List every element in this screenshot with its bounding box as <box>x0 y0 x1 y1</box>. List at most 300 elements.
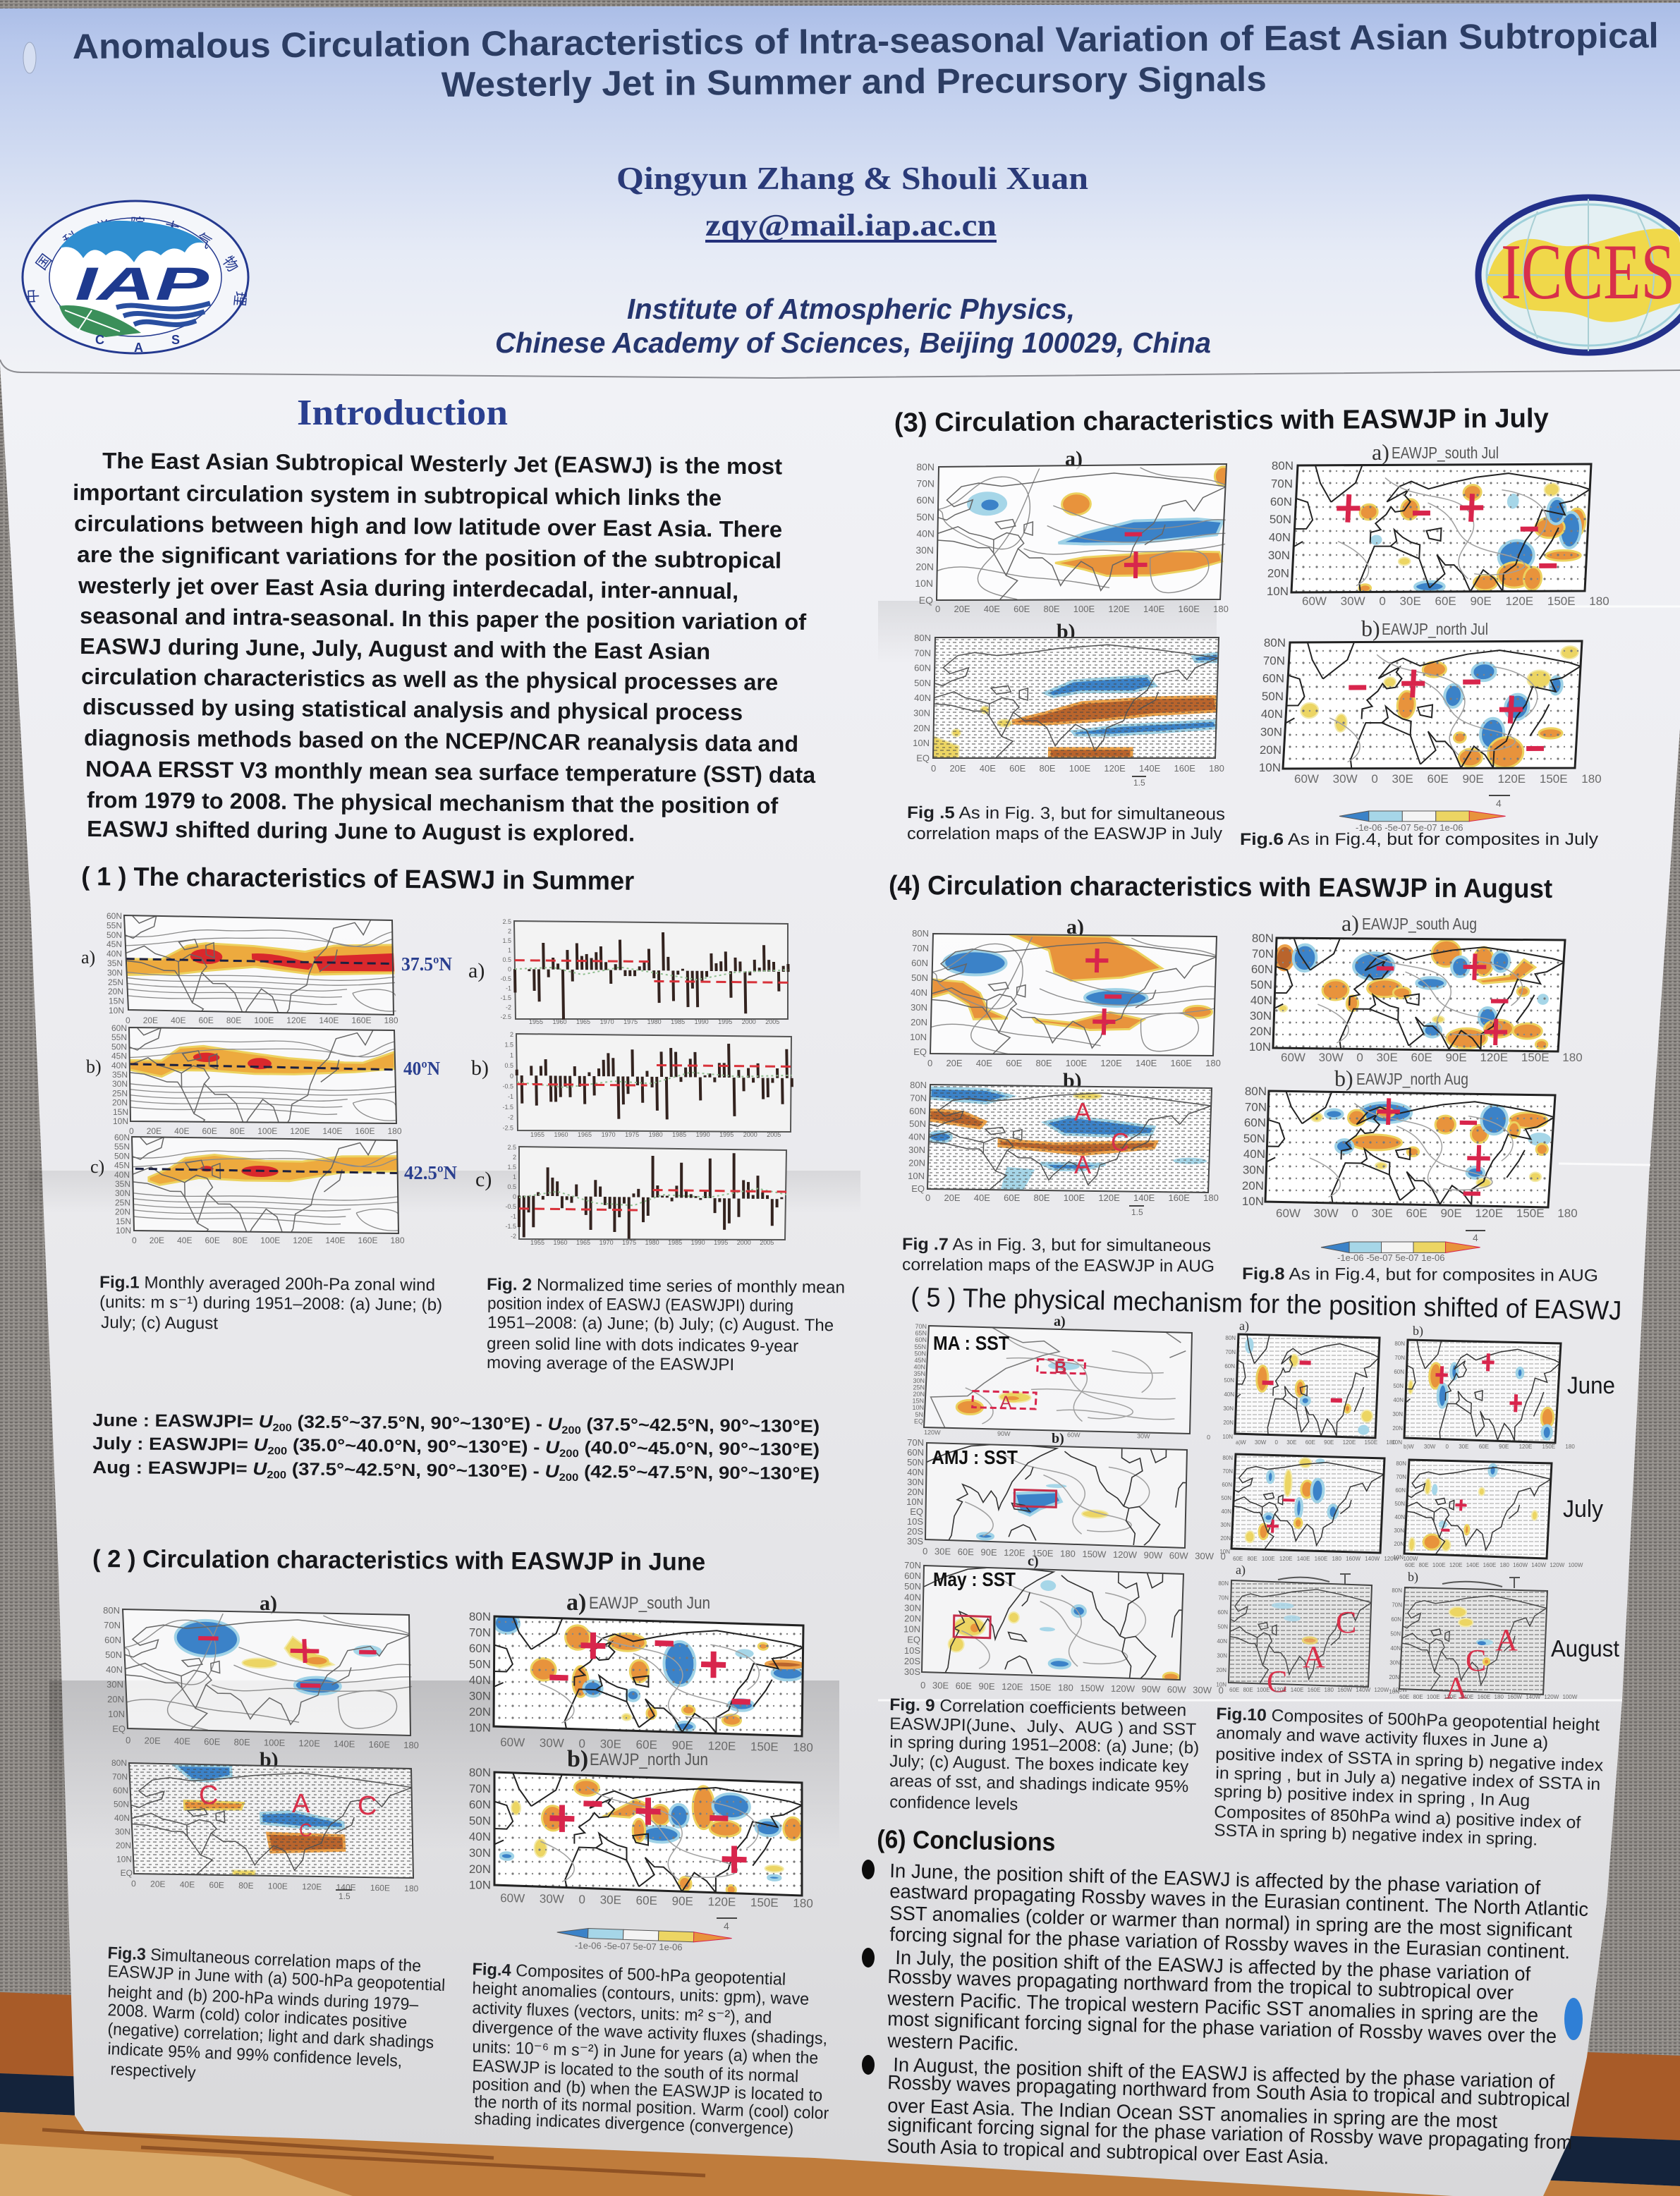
map: Fig.8a: 50N <box>1250 978 1272 992</box>
caption: Fig.1: July; (c) August <box>101 1313 219 1333</box>
equations: EASWJPI definitions: (37.5°~42.5°N, 90°~130°E) <box>581 1415 820 1436</box>
map: Fig.3b 200-hPa wind correlation: b) <box>260 1748 279 1771</box>
map: Fig.10 August b: 30N <box>1389 1660 1400 1666</box>
map: Fig.6b: 60N <box>1262 672 1284 685</box>
intro text block: circulation characteristics as well as the physical processes are <box>81 664 778 695</box>
map: Fig.5a: 40N <box>916 527 935 539</box>
map: Fig.9a MA SST: 5N <box>915 1411 923 1418</box>
map: Fig.4b EAWJP north June <box>469 1746 813 1910</box>
caption: Fig.3: 2008. Warm (cold) color indicates positive <box>107 2001 408 2032</box>
caption: Fig.4: height anomalies (contours, units: gpm), wave <box>472 1979 810 2009</box>
equations: EASWJPI definitions: July : EASWJPI= U <box>92 1434 267 1455</box>
map: Fig.7a <box>910 915 1221 1068</box>
caption: Fig.1: (units: m s⁻¹) during 1951–2008: (a) June; (b) <box>99 1293 442 1314</box>
intro text block: important circulation system in subtropical which links the <box>73 480 722 511</box>
map: Fig.4a EAWJP south June <box>469 1590 813 1755</box>
caption: Fig.7 <box>902 1235 1215 1276</box>
map: Fig.5b: 40N <box>914 693 931 703</box>
map: Fig.8b: 60N <box>1244 1116 1266 1130</box>
bar chart: Fig.2a June index: 1.5 <box>502 937 511 944</box>
logo: IAP <box>21 200 250 355</box>
map: Fig.6b: 50N <box>1262 690 1284 703</box>
map: Fig.3b 200-hPa wind correlation: 50N <box>114 1800 129 1810</box>
caption: Fig.3: (negative) correlation; light and dark shadings <box>107 2020 434 2052</box>
map: Fig.1c August zonal wind: 60N <box>114 1133 130 1142</box>
intro text block: are the significant variations for the position of the subtropical <box>77 542 781 573</box>
map: Fig.3b 200-hPa wind correlation: C <box>299 1819 312 1841</box>
map: Fig.6b: b) <box>1361 616 1380 641</box>
label: chart b: b) <box>471 1056 489 1080</box>
equations: EASWJPI definitions: (32.5°~37.5°N, 90°~130°E) - <box>292 1412 548 1434</box>
map: Fig.1c August zonal wind: 30N <box>115 1188 130 1198</box>
intro text block: The East Asian Subtropical Westerly Jet (EASWJ) is the most <box>102 448 783 479</box>
map: Fig.5a: 0 20E 40E 60E 80E 100E 120E 140E 160E 180 <box>935 604 1229 614</box>
authors: Qingyun Zhang & Shouli Xuan <box>616 160 1088 196</box>
map: Fig.1a June zonal wind: 0 20E 40E 60E 80E 100E 120E 140E 160E 180 <box>126 1015 398 1025</box>
map: Fig.1a June zonal wind: 55N <box>106 920 122 930</box>
caption: Fig.8: Fig.8 As in Fig.4, but for composites in AUG <box>1242 1264 1598 1286</box>
map: Fig.3b 200-hPa wind correlation: 30N <box>115 1826 130 1836</box>
heading: section 5: ( 5 ) The physical mechanism for the position shifted of EASWJ <box>911 1283 1622 1326</box>
map: Fig.9c May SST: EQ <box>907 1635 920 1645</box>
map: Fig.10 June a: 60N <box>1224 1363 1235 1370</box>
conclusion: July: most significant forcing signal for the phase variation of Rossby waves over the <box>887 2008 1557 2047</box>
map: Fig.6b <box>1259 616 1602 786</box>
heading: section 3: (3) Circulation characteristics with EASWJP in July <box>894 404 1549 438</box>
map: Fig.10 July b <box>1393 1460 1583 1568</box>
map: Fig.7b <box>908 1069 1219 1217</box>
caption: Fig.6: Fig.6 As in Fig.4, but for composites in July <box>1240 830 1598 849</box>
map: Fig.1a June zonal wind: 20N <box>108 987 123 996</box>
map: Fig.10 July b: 10N <box>1393 1554 1404 1561</box>
map: Fig.6b: 60W 30W 0 30E 60E 90E 120E 150E 180 <box>1294 772 1602 786</box>
map: Fig.9c May SST: 40N <box>904 1592 921 1602</box>
caption: Fig.9: EASWJPI(June、July、AUG ) and SST <box>889 1714 1197 1739</box>
caption: Fig.7: correlation maps of the EASWJP in AUG <box>902 1255 1215 1276</box>
map: Fig.7b: EQ <box>911 1183 925 1194</box>
map: Fig.1a June zonal wind: 35N <box>107 958 123 968</box>
map: Fig.1c August zonal wind: 40N <box>114 1170 130 1180</box>
caption: Fig.4 <box>472 1960 829 2139</box>
map: Fig.3a geopotential correlation: a) <box>260 1592 277 1615</box>
conclusion: August: Rossby waves propagating northward from South Asia to tropical and subtropical <box>887 2071 1570 2111</box>
map: Fig.6a <box>1267 439 1609 608</box>
equations: EASWJPI definitions: U <box>545 1438 560 1458</box>
colour bar: Fig.6 <box>1339 811 1506 833</box>
map: Fig.9a MA SST: 30N <box>913 1377 925 1384</box>
map: Fig.8a: 40N <box>1250 994 1272 1007</box>
label: 37.5N: 37.5ºN <box>401 953 452 975</box>
map: Fig.1a June zonal wind: 15N <box>109 996 124 1006</box>
bar chart: Fig.2b July index: -2.5 <box>502 1124 513 1131</box>
map: Fig.3a geopotential correlation: 10N <box>108 1709 125 1719</box>
map: Fig.1b July zonal wind: 40N <box>111 1061 127 1070</box>
caption: Fig.4: the north of its normal position. Warm (cool) color <box>474 2092 829 2123</box>
caption: Fig.9: Fig. 9 Correlation coefficients between <box>889 1695 1186 1720</box>
equations: EASWJPI definitions: 200 <box>561 1425 581 1436</box>
bar chart: Fig.2b July index: 2 <box>510 1031 513 1038</box>
label: chart a: a) <box>468 959 485 982</box>
map: Fig.9a MA SST: a) <box>1054 1314 1066 1329</box>
map: Fig.1b July zonal wind: 55N <box>111 1032 127 1042</box>
panel: introduction <box>73 393 815 846</box>
map: Fig.10 August b: b) <box>1408 1570 1418 1585</box>
map: Fig.8b: 70N <box>1245 1100 1267 1114</box>
map: Fig.7b: 30N <box>908 1145 925 1155</box>
map: Fig.1a June zonal wind: 10N <box>109 1006 124 1015</box>
map: Fig.8a: 10N <box>1249 1040 1271 1054</box>
bar chart: Fig.2b July index: 0.5 <box>504 1062 513 1069</box>
bullet 2 <box>862 1948 875 1968</box>
map: Fig.4a EAWJP south June: EAWJP_south Jun <box>589 1594 710 1613</box>
map: Fig.1a June zonal wind: 30N <box>107 968 123 977</box>
equations: EASWJPI definitions: 200 <box>272 1422 292 1434</box>
map: Fig.10 August a <box>1216 1563 1408 1699</box>
map: Fig.7b: b) <box>1063 1069 1082 1092</box>
map: Fig.10 July a: 30N <box>1220 1522 1231 1528</box>
map: Fig.10 August a: 40N <box>1217 1638 1227 1645</box>
equations: EASWJPI definitions: June : EASWJPI= U <box>92 1410 272 1432</box>
map: Fig.3b 200-hPa wind correlation: C <box>358 1791 377 1821</box>
map: Fig.10 June a <box>1222 1319 1396 1446</box>
map: Fig.7b: 80N <box>910 1080 927 1090</box>
map: Fig.10 August a: 30N <box>1217 1653 1227 1659</box>
map: Fig.4b EAWJP north June: 70N <box>469 1782 491 1795</box>
map: Fig.4a EAWJP south June: 50N <box>469 1657 491 1671</box>
map: Fig.9b AMJ SST: 20S <box>907 1526 923 1537</box>
intro text block: diagnosis methods based on the NCEP/NCAR reanalysis data and <box>84 725 798 757</box>
map: Fig.10 July b: 60E 80E 100E 120E 140E 160E 180 160W 140W 120W 100W <box>1405 1562 1583 1568</box>
map: Fig.4a EAWJP south June: 70N <box>469 1626 491 1639</box>
map: Fig.10 June b: 50N <box>1393 1383 1404 1389</box>
map: Fig.8a: 60N <box>1251 963 1273 976</box>
map: Fig.9b AMJ SST: b) <box>1052 1431 1064 1446</box>
bar chart: Fig.2b July index: -1.5 <box>502 1104 513 1111</box>
map: Fig.6a: a) <box>1372 439 1389 465</box>
map: Fig.5b: 60N <box>914 663 931 673</box>
heading: section 1: ( 1 ) The characteristics of EASWJ in Summer <box>81 862 634 896</box>
map: Fig.10 August a: A <box>1303 1640 1325 1674</box>
bar chart: Fig.2c August index: 1 <box>513 1173 516 1181</box>
map: Fig.10 July a: 70N <box>1222 1468 1233 1475</box>
map: Fig.7a: EQ <box>913 1047 927 1057</box>
map: Fig.6a: 60N <box>1270 495 1292 508</box>
map: Fig.1c August zonal wind: 55N <box>114 1142 130 1152</box>
map: Fig.5a: a) <box>1065 447 1083 470</box>
map: Fig.10 August a: 70N <box>1218 1595 1229 1601</box>
map: Fig.10 August a: 50N <box>1217 1623 1228 1630</box>
conclusion: August: over East Asia. The Indian Ocean SST anomalies in spring are the most <box>887 2094 1498 2133</box>
caption: Fig.3: respectively <box>110 2060 196 2082</box>
map: Fig.6a: 70N <box>1271 477 1293 490</box>
map: Fig.4b EAWJP north June: EAWJP_north Jun <box>590 1750 708 1769</box>
bar chart: Fig.2c August index: -1.5 <box>505 1223 516 1230</box>
logo: ICCES <box>1478 197 1680 353</box>
map: Fig.7a: 10N <box>910 1032 927 1042</box>
panel: section 2 <box>92 1545 829 2139</box>
map: Fig.10 August a: 10N <box>1216 1681 1226 1688</box>
pin <box>23 42 36 73</box>
panel: section 1 <box>81 862 845 1486</box>
map: Fig.7a: 40N <box>911 987 927 998</box>
map: Fig.5b: 1.5 <box>1133 778 1145 788</box>
map: Fig.5a: 10N <box>915 578 933 589</box>
caption: Fig.10: in spring , but in July a) negative index of SSTA in <box>1215 1764 1601 1794</box>
label: August: August <box>1551 1635 1619 1661</box>
bar chart: Fig.2c August index: -2 <box>511 1233 516 1240</box>
map: Fig.10 August b: 50N <box>1390 1630 1401 1637</box>
caption: Fig.3: EASWJP in June with (a) 500-hPa geopotential <box>107 1962 446 1995</box>
bar chart: Fig.2a June index: 1955 1960 1965 1970 1975 1980 1985 1990 1995 2000 2005 <box>529 1018 779 1025</box>
map: Fig.9a MA SST: 20N <box>913 1391 925 1398</box>
map: Fig.10 July b: 60N <box>1395 1487 1406 1494</box>
logo: IAP: A <box>134 341 143 355</box>
map: Fig.4b EAWJP north June: 10N <box>469 1879 491 1892</box>
map: Fig.10 August b: 10N <box>1389 1688 1399 1695</box>
scale arrow: Fig.8 <box>1466 1231 1485 1243</box>
panel: section 3 <box>894 404 1609 849</box>
map: Fig.9a MA SST: 60N <box>915 1336 927 1343</box>
map: Fig.3a geopotential correlation <box>103 1592 419 1750</box>
map: Fig.5b: b) <box>1057 620 1076 643</box>
map: Fig.8a: 30N <box>1250 1009 1272 1023</box>
map: Fig.5a: 20N <box>915 561 934 573</box>
map: Fig.3a geopotential correlation: 60N <box>104 1635 121 1645</box>
map: Fig.10 July b: 20N <box>1394 1541 1404 1547</box>
map: Fig.10 August a: C <box>1267 1664 1287 1699</box>
intro text block: from 1979 to 2008. The physical mechanism that the position of <box>87 787 779 819</box>
map: Fig.9b AMJ SST: 30S <box>907 1536 923 1547</box>
label: b: b) <box>86 1056 102 1077</box>
map: Fig.3a geopotential correlation: 30N <box>106 1679 123 1690</box>
map: Fig.10 June b: b) <box>1413 1324 1423 1338</box>
map: Fig.10 July a: 80N <box>1222 1455 1233 1461</box>
map: Fig.9a MA SST: 10N <box>912 1404 924 1411</box>
equations: EASWJPI definitions: (37.5°~42.5°N, 90°~130°E) - <box>286 1459 545 1482</box>
map: Fig.9c May SST: 70N <box>904 1560 921 1570</box>
conclusion: July: In July, the position shift of the EASWJ is affected by the phase variation of <box>895 1946 1531 1985</box>
map: Fig.9c May SST: 50N <box>904 1581 921 1592</box>
bar chart: Fig.2a June index: 1 <box>508 946 511 953</box>
map: Fig.3a geopotential correlation: 80N <box>103 1605 120 1616</box>
map: Fig.3a geopotential correlation: 40N <box>106 1664 123 1675</box>
map: Fig.10 July a <box>1219 1454 1418 1562</box>
conclusion: August: significant forcing signal for the phase variation of Rossby wave propagating from <box>887 2113 1572 2153</box>
map: Fig.9b AMJ SST <box>906 1431 1226 1561</box>
map: Fig.1a June zonal wind: 45N <box>106 939 122 949</box>
map: Fig.7b: 0 20E 40E 60E 80E 100E 120E 140E 160E 180 <box>925 1192 1219 1203</box>
map: Fig.5a <box>915 447 1232 614</box>
map: Fig.8b: 20N <box>1242 1179 1264 1192</box>
map: Fig.9a MA SST: 55N <box>914 1343 926 1350</box>
map: Fig.9b AMJ SST: 10S <box>907 1516 923 1527</box>
map: Fig.4a EAWJP south June: 60N <box>469 1642 491 1655</box>
caption: Fig.10: SSTA in spring b) negative index in spring. <box>1214 1821 1538 1850</box>
map: Fig.3b 200-hPa wind correlation: 20N <box>116 1841 131 1850</box>
map: Fig.1c August zonal wind: 45N <box>114 1161 130 1171</box>
map: Fig.6a: 30N <box>1268 549 1290 562</box>
map: Fig.10 August a: 60N <box>1217 1609 1228 1616</box>
map: Fig.4b EAWJP north June: 60W 30W 0 30E 60E 90E 120E 150E 180 <box>500 1891 813 1910</box>
caption: Fig.10: Composites of 850hPa wind a) positive index of <box>1214 1802 1581 1832</box>
map: Fig.4b EAWJP north June: b) <box>567 1746 588 1772</box>
map: Fig.7a: a) <box>1066 915 1084 939</box>
caption: Fig.2: green solid line with dots indicates 9-year <box>487 1334 798 1356</box>
map: Fig.10 July a: 60N <box>1222 1482 1232 1488</box>
map: Fig.8a: 60W 30W 0 30E 60E 90E 120E 150E 180 <box>1281 1051 1583 1064</box>
map: Fig.9c May SST: 60N <box>904 1570 921 1581</box>
map: Fig.8b: 60W 30W 0 30E 60E 90E 120E 150E 180 <box>1276 1207 1578 1220</box>
map: Fig.10 August a: 80N <box>1218 1580 1229 1587</box>
map: Fig.9b AMJ SST: EQ <box>910 1506 923 1517</box>
map: Fig.5a: 60N <box>916 494 935 506</box>
map: Fig.1c August zonal wind: 20N <box>115 1207 130 1217</box>
map: Fig.5a: 80N <box>916 461 935 472</box>
map: Fig.1b July zonal wind: 15N <box>113 1107 128 1117</box>
bar chart: Fig.2c August index: -0.5 <box>505 1203 516 1210</box>
panel: section 5 <box>889 1283 1622 1850</box>
map: Fig.6b: 70N <box>1263 654 1285 667</box>
map: Fig.10 July b: 50N <box>1394 1501 1405 1507</box>
map: Fig.4a EAWJP south June: 40N <box>469 1673 491 1687</box>
caption: Fig.10: spring b) positive index in spring , In Aug <box>1214 1782 1530 1810</box>
panel: conclusions <box>862 1824 1588 2168</box>
map: Fig.10 July b: 40N <box>1394 1514 1405 1520</box>
map: Fig.1c August zonal wind <box>114 1134 405 1243</box>
map: Fig.10 August b: 80N <box>1392 1587 1402 1594</box>
map: Fig.9a MA SST: 45N <box>914 1357 926 1364</box>
label: chart c: c) <box>475 1168 492 1191</box>
map: Fig.10 July b: 70N <box>1396 1474 1406 1480</box>
map: Fig.9b AMJ SST: 70N <box>907 1437 924 1448</box>
map: Fig.6b: EAWJP_north Jul <box>1382 620 1488 638</box>
intro text block: discussed by using statistical analysis and physical process <box>83 694 743 725</box>
map: Fig.3b 200-hPa wind correlation: 1.5 <box>339 1891 351 1901</box>
bar chart: Fig.2c August index: 0.5 <box>507 1183 516 1190</box>
map: Fig.5b: 10N <box>913 738 930 748</box>
map: Fig.1c August zonal wind: 35N <box>115 1179 130 1189</box>
map: Fig.9a MA SST: B <box>1054 1358 1066 1377</box>
bar chart: Fig.2b July index: 1.5 <box>504 1042 513 1049</box>
bar chart: Fig.2b July index: -1 <box>508 1093 513 1100</box>
map: Fig.9b AMJ SST: 10N <box>906 1496 923 1507</box>
bar chart: Fig.2c August index: 2 <box>513 1154 516 1161</box>
heading: section 2: ( 2 ) Circulation characteristics with EASWJP in June <box>92 1545 705 1576</box>
map: Fig.10 June a: a) <box>1239 1319 1249 1334</box>
map: Fig.10 July a: 40N <box>1221 1508 1231 1515</box>
map: Fig.10 August b: A <box>1445 1671 1468 1705</box>
map: Fig.10 June b: 30N <box>1392 1411 1403 1417</box>
map: Fig.1b July zonal wind: 20N <box>112 1098 128 1108</box>
caption: Fig.4: shading indicates divergence (convergence) <box>474 2109 794 2139</box>
bullet 1 <box>862 1860 875 1879</box>
map: Fig.10 August a: 20N <box>1216 1667 1226 1673</box>
caption: Fig.10: positive index of SSTA in spring b) negative index <box>1215 1745 1604 1775</box>
equations: EASWJPI definitions: 200 <box>267 1469 286 1481</box>
caption: Fig.3: Fig.3 Simultaneous correlation maps of the <box>107 1944 422 1976</box>
map: Fig.4b EAWJP north June: 30N <box>469 1846 491 1860</box>
map: Fig.9c May SST: 10S <box>904 1645 920 1656</box>
map: Fig.4a EAWJP south June: 60W 30W 0 30E 60E 90E 120E 150E 180 <box>500 1736 813 1755</box>
map: Fig.6a: EAWJP_south Jul <box>1392 444 1499 462</box>
map: Fig.1b July zonal wind: 45N <box>111 1051 127 1061</box>
colour bar: Fig.6: -1e-06 -5e-07 5e-07 1e-06 <box>1356 822 1463 833</box>
map: Fig.9c May SST: 20S <box>904 1656 920 1666</box>
map: Fig.10 July a: 10N <box>1219 1549 1230 1555</box>
map: Fig.10 July a: 20N <box>1220 1535 1231 1542</box>
map: Fig.1c August zonal wind: 0 20E 40E 60E 80E 100E 120E 140E 160E 180 <box>132 1236 405 1245</box>
caption: Fig.4: units: 10⁻⁶ m s⁻²) in June for years (a) when the <box>472 2037 819 2068</box>
colour bar: Fig.8 <box>1321 1242 1480 1263</box>
map: Fig.4b EAWJP north June: 80N <box>469 1766 491 1779</box>
map: Fig.1b July zonal wind: 50N <box>111 1042 127 1051</box>
map: Fig.5b: 80N <box>914 633 931 643</box>
equations: EASWJPI definitions: 200 <box>267 1445 287 1457</box>
caption: Fig.7: Fig .7 As in Fig. 3, but for simultaneous <box>902 1235 1211 1255</box>
label: c: c) <box>90 1157 104 1177</box>
equations: EASWJPI definitions: U <box>544 1462 560 1482</box>
intro text block <box>73 448 815 846</box>
bar chart: Fig.2a June index: -1.5 <box>500 994 511 1001</box>
map: Fig.1a June zonal wind: 40N <box>106 949 122 959</box>
title: Westerly Jet in Summer and Precursory Signals <box>442 59 1267 104</box>
title <box>73 16 1659 104</box>
heading: section 4: (4) Circulation characteristics with EASWJP in August <box>889 871 1553 904</box>
map: Fig.9a MA SST: 65N <box>915 1330 927 1337</box>
map: Fig.1a June zonal wind: 50N <box>106 930 122 940</box>
caption: Fig.10: anomaly and wave activity fluxes in June a) <box>1216 1724 1549 1752</box>
map: Fig.4a EAWJP south June: a) <box>566 1590 586 1616</box>
label: a: a) <box>81 947 95 968</box>
intro text block: NOAA ERSST V3 monthly mean sea surface temperature (SST) data <box>85 756 815 788</box>
affiliation <box>495 293 1211 359</box>
map: Fig.6b: 10N <box>1259 761 1281 774</box>
scale arrow: Fig.6: 4 <box>1496 798 1502 809</box>
map: Fig.6a: 10N <box>1267 585 1289 598</box>
map: Fig.7a: 0 20E 40E 60E 80E 100E 120E 140E 160E 180 <box>927 1058 1221 1068</box>
map: Fig.10 June b: 80N <box>1394 1341 1405 1347</box>
map: Fig.4a EAWJP south June: 80N <box>469 1610 491 1623</box>
map: Fig.5b: 70N <box>914 647 931 658</box>
label: 40N: 40ºN <box>403 1058 440 1079</box>
map: Fig.10 August a: a) <box>1236 1563 1246 1578</box>
map: Fig.7b: A <box>1074 1150 1091 1179</box>
map: Fig.10 August b <box>1389 1570 1578 1705</box>
map: Fig.8b: EAWJP_north Aug <box>1356 1070 1468 1088</box>
map: Fig.5a: 30N <box>915 544 934 556</box>
map: Fig.9c May SST <box>903 1554 1224 1695</box>
map: Fig.1c August zonal wind: 50N <box>114 1151 130 1161</box>
map: Fig.10 August b: 70N <box>1392 1602 1402 1608</box>
map: Fig.5a: 50N <box>916 511 935 523</box>
bar chart: Fig.2a June index <box>500 918 789 1025</box>
map: Fig.10 August b: 20N <box>1389 1674 1399 1680</box>
background: wooden rail and floor <box>0 1992 1680 2196</box>
label: June: June <box>1567 1372 1615 1399</box>
conclusion: August: In August, the position shift of the EASWJ is affected by the phase variation of <box>893 2054 1555 2093</box>
map: Fig.8a: 80N <box>1252 932 1274 945</box>
logo: IAP: S <box>171 333 180 347</box>
label: July: July <box>1563 1496 1603 1523</box>
map: Fig.5b: 30N <box>913 708 930 718</box>
map: Fig.10 June a: 70N <box>1225 1349 1236 1355</box>
caption: Fig.9: July; (c) August. The boxes indicate key <box>889 1752 1188 1776</box>
map: Fig.3a geopotential correlation: EQ <box>112 1724 126 1734</box>
map: Fig.10 August b: 40N <box>1390 1645 1401 1652</box>
email: zqy@mail.iap.ac.cn <box>705 208 997 243</box>
map: Fig.3b 200-hPa wind correlation: 70N <box>112 1771 128 1781</box>
map: Fig.9c May SST: 30N <box>904 1602 921 1613</box>
